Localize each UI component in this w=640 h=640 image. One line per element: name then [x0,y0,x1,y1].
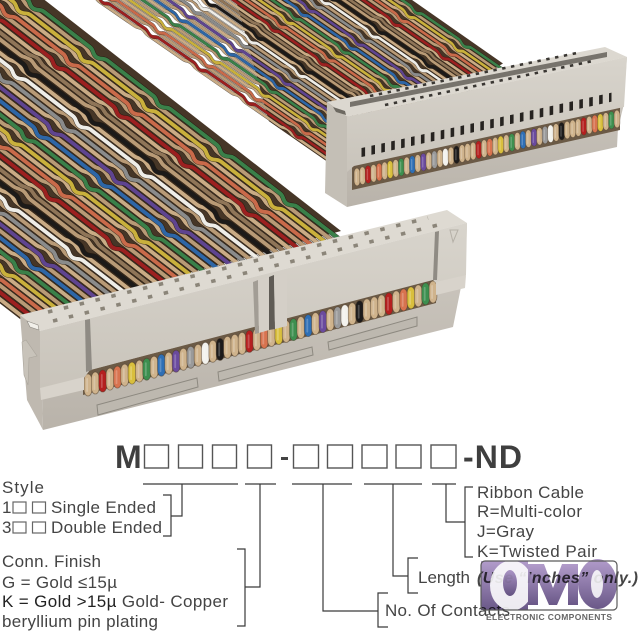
legend: style: Style [2,478,44,497]
part number code: M [115,439,142,475]
legend: length [418,568,638,587]
watermark logo [481,559,617,622]
legend: connector finish: G = Gold ≤15µ [2,573,117,592]
part number code: -ND [463,439,522,475]
lower connector [20,210,467,430]
watermark logo: ELECTRONIC COMPONENTS [486,612,612,622]
legend: style: 3 [2,518,11,537]
legend: ribbon cable [477,483,597,561]
legend: ribbon cable: Ribbon Cable [477,483,584,502]
lower ribbon cable [0,0,344,323]
legend: style [2,478,162,537]
legend: connector finish [2,552,228,631]
upper ribbon cable [47,0,525,199]
leader lines and brackets [143,484,473,627]
upper connector [325,47,627,207]
legend: style: Single Ended [51,498,156,517]
part number code [115,439,522,475]
legend: ribbon cable: K=Twisted Pair [477,542,597,561]
legend: style: 1 [2,498,11,517]
legend: number of contacts: No. Of Contacts [385,601,510,620]
legend: ribbon cable: R=Multi-color [477,502,582,521]
legend: style: Double Ended [51,518,162,537]
legend: length: Length [418,568,470,587]
legend: connector finish: Conn. Finish [2,552,101,571]
legend: connector finish: K = Gold >15µ Gold- Copper [2,592,228,611]
legend: connector finish: beryllium pin plating [2,612,158,631]
legend: length: (Use “Inches” only.) [477,570,638,587]
legend: ribbon cable: J=Gray [477,522,534,541]
